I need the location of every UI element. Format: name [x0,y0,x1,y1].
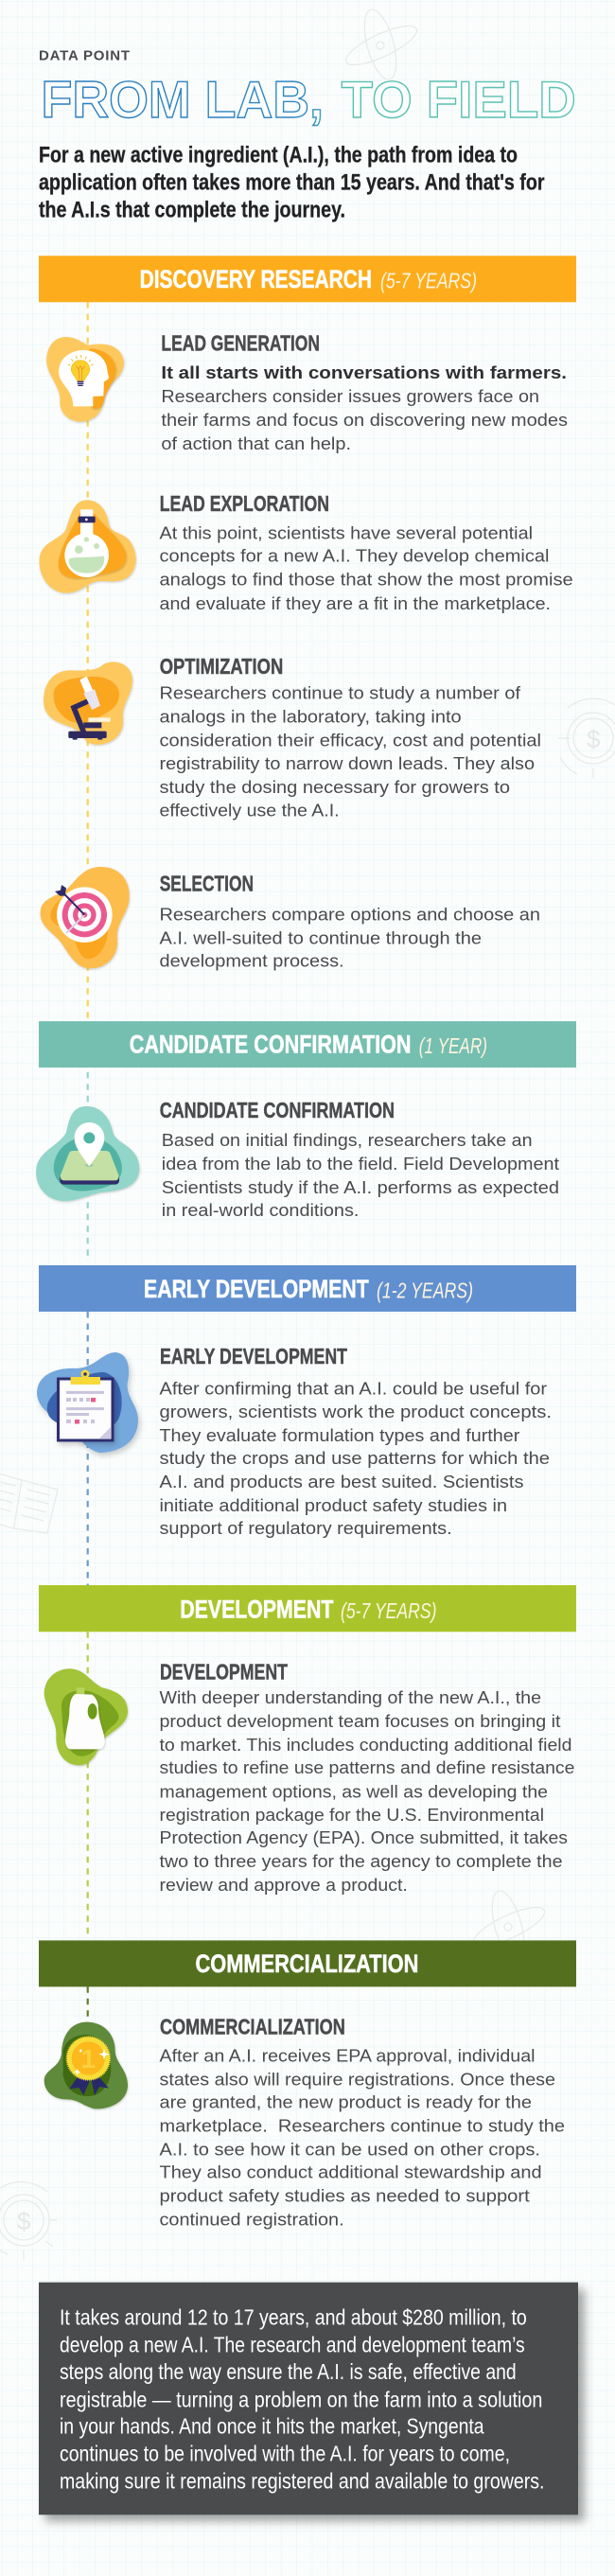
text: selection: A.I. well-suited to continue through the [159,927,482,947]
text: early development: growers, scientists work the product concepts. [159,1402,552,1421]
band: early development: (1-2 YEARS) [377,1278,473,1302]
panel: summary callout: steps along the way ensure the A.I. is safe, effective and [60,2359,517,2384]
text: commercialization: They also conduct additional stewardship and [159,2162,542,2182]
band: early development: EARLY DEVELOPMENT [144,1275,369,1303]
icon: clipboard [37,1352,138,1453]
panel: summary callout: in your hands. And once it hits the market, Syngenta [60,2414,484,2439]
text: development: Protection Agency (EPA). Once submitted, it takes [159,1827,568,1847]
text: early development: study the crops and use patterns for which the [159,1448,550,1468]
text: lead generation: Researchers consider issues growers face on [161,386,539,406]
intro text: For a new active ingredient (A.I.), the path from idea to [39,144,518,168]
connector: candidate [87,1072,89,1262]
icon: microscope [44,662,132,745]
text: development: two to three years for the agency to complete the [159,1851,562,1871]
icon: lightbulb head [46,337,124,422]
data point label: DATA POINT [39,47,130,63]
text: lead exploration [159,491,573,613]
connector: development [87,1632,89,1936]
text: selection: SELECTION [160,871,254,895]
watermark: dollar target right: $ [587,725,601,753]
text: lead exploration: concepts for a new A.I. They develop chemical [159,546,549,566]
watermark: atom lower [469,1888,549,1964]
text: candidate confirmation: Based on initial findings, researchers take an [162,1130,533,1150]
text: lead exploration: At this point, scientists have several potential [159,523,533,543]
text: development: to market. This includes conducting additional field [159,1735,571,1755]
text: commercialization: states also will require registrations. Once these [159,2070,555,2090]
text: optimization: effectively use the A.I. [159,801,340,820]
text: development: registration package for the U.S. Environmental [159,1805,544,1825]
text: early development: EARLY DEVELOPMENT [160,1344,347,1368]
text: development: With deeper understanding of the new A.I., the [159,1687,541,1707]
panel: summary callout: It takes around 12 to 17 years, and about $280 million, to [60,2305,527,2330]
connector: early development [87,1312,89,1585]
intro text: the A.I.s that complete the journey. [39,198,345,222]
text: early development: They evaluate formulation types and further [159,1425,519,1445]
panel: summary callout: registrable — turning a problem on the farm into a solution [60,2387,542,2411]
text: lead generation: their farms and focus on discovering new modes [161,410,568,430]
text: lead exploration: and evaluate if they are a fit in the marketplace. [159,593,551,613]
band: discovery research: DISCOVERY RESEARCH [140,265,372,293]
title [42,71,576,129]
panel: summary callout: making sure it remains registered and available to growers. [60,2469,545,2494]
watermark: dollar target left [0,2182,57,2260]
text: early development: A.I. and products are best suited. Scientists [159,1472,524,1491]
band: candidate confirmation: (1 YEAR) [419,1033,487,1058]
text: lead exploration: LEAD EXPLORATION [160,491,329,516]
text: commercialization [159,2014,565,2230]
text: selection: development process. [159,950,344,971]
connector: commercialization [87,1986,89,2023]
title: TO FIELD [342,71,576,129]
text: development: studies to refine use patterns and define resistance [159,1757,574,1777]
intro text [39,144,545,222]
watermark: dollar target right [558,698,615,778]
text: lead generation [161,331,568,453]
icon: target [41,867,130,968]
text: optimization: Researchers continue to study a number of [159,683,521,703]
text: selection [159,871,540,971]
text: commercialization: are granted, the new product is ready for the [159,2091,532,2111]
text: lead exploration: analogs to find those that show the most promise [159,570,573,589]
connector: discovery [87,302,89,1021]
text: candidate confirmation: in real-world conditions. [162,1200,359,1220]
text: optimization: study the dosing necessary for growers to [159,777,510,797]
band: development: DEVELOPMENT [180,1595,334,1623]
text: development: review and approve a product. [159,1875,408,1895]
text: candidate confirmation: Scientists study if the A.I. performs as expected [162,1177,559,1197]
watermark: atom top [342,7,421,82]
text: development [159,1659,574,1895]
text: commercialization: A.I. to see how it can be used on other crops. [159,2139,540,2159]
band: commercialization [39,1940,576,1986]
band: commercialization: COMMERCIALIZATION [195,1950,418,1978]
band: early development [39,1265,576,1312]
text: early development: After confirming that an A.I. could be useful for [159,1378,547,1398]
text: candidate confirmation [160,1098,559,1220]
text: commercialization: product safety studies as needed to support [159,2186,530,2206]
panel: summary callout [39,2283,578,2514]
panel: summary callout: develop a new A.I. The research and development team’s [60,2333,525,2357]
text: candidate confirmation: idea from the lab to the field. Field Development [162,1154,559,1173]
band: candidate confirmation [39,1021,576,1067]
text: commercialization: continued registration. [159,2210,344,2230]
text: early development: support of regulatory requirements. [159,1518,452,1538]
text: commercialization: After an A.I. receives EPA approval, individual [159,2046,536,2066]
band: development: (5-7 YEARS) [341,1598,437,1623]
band: discovery research: (5-7 YEARS) [380,269,477,293]
icon: jug [44,1668,128,1765]
text: commercialization: marketplace. Researchers continue to study the [159,2115,565,2135]
text: early development: initiate additional product safety studies in [159,1495,507,1515]
icon: map pin [36,1106,139,1201]
watermark: open book [0,1469,58,1533]
band: candidate confirmation: CANDIDATE CONFIRMATION [130,1030,412,1058]
icon: medal: 1 [81,2044,96,2073]
text: optimization: analogs in the laboratory, taking into [159,707,462,727]
text: selection: Researchers compare options and choose an [159,905,540,924]
text: lead generation: of action that can help. [161,433,351,453]
text: optimization: registrability to narrow down leads. They also [159,753,535,773]
watermark: dollar target left: $ [17,2207,31,2235]
text: lead generation: LEAD GENERATION [161,331,320,356]
text: early development [159,1344,552,1538]
text: development: product development team focuses on bringing it [159,1711,560,1731]
text: development: management options, as well as developing the [159,1781,548,1801]
panel: summary callout: continues to be involved with the A.I. for years to come, [60,2442,510,2466]
text: optimization: consideration their efficacy, cost and potential [159,731,541,750]
text: lead generation: It all starts with conversations with farmers. [161,362,567,382]
icon: medal [44,2022,128,2108]
title: FROM LAB, [42,71,324,129]
text: candidate confirmation: CANDIDATE CONFIRMATION [160,1098,395,1122]
band: discovery research [39,256,576,302]
icon: flask [40,500,135,593]
text: optimization [159,654,541,820]
band: development [39,1585,576,1632]
text: development: DEVELOPMENT [160,1659,288,1684]
text: commercialization: COMMERCIALIZATION [160,2014,345,2038]
text: optimization: OPTIMIZATION [160,654,283,679]
